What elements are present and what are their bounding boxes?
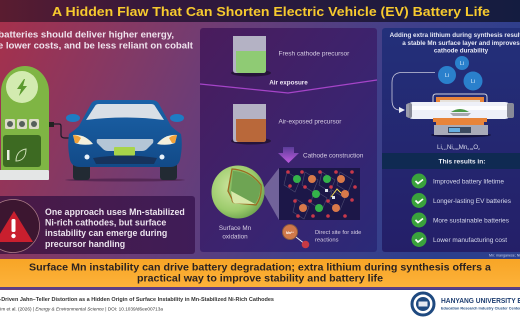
icon: cathode particle — [212, 166, 264, 218]
conclusion band — [0, 259, 520, 290]
arrow: cathode construction — [278, 147, 299, 163]
label: direct site: reactions — [315, 238, 339, 244]
chemical formula: 1+x — [442, 147, 447, 151]
chemical formula: O — [473, 144, 478, 151]
icon: Mn and oxygen site: Mn³⁺ — [286, 231, 294, 235]
label: surface Mn oxidation — [219, 225, 252, 240]
chemical formula: 0.04 — [467, 147, 474, 151]
icon: lithium ions: Li — [471, 79, 475, 85]
citation — [0, 297, 274, 312]
divider: air exposure — [200, 80, 377, 93]
warning text — [45, 207, 185, 249]
result: improved battery lifetime: Improved battery lifetime — [433, 178, 505, 186]
chemical formula: 2 — [478, 147, 480, 151]
solution text: a stable Mn surface layer and improves — [402, 40, 520, 47]
chemical formula: Mn — [459, 144, 468, 151]
conclusion text — [29, 262, 491, 284]
icon: warning — [0, 200, 40, 252]
icon: tube furnace — [406, 94, 514, 138]
results heading — [382, 153, 520, 169]
crystal structure — [279, 168, 360, 220]
icon: lithium ions: Li — [460, 61, 464, 67]
intro text — [0, 30, 194, 52]
logo: Hanyang University: Education Research Industry Cluster Center — [441, 306, 520, 310]
label: air-exposed precursor: Air-exposed precursor — [278, 118, 342, 126]
icon: lithium ions: Li — [445, 73, 449, 79]
icon: EV charger — [0, 66, 69, 180]
label: air exposure: Air exposure — [269, 80, 308, 86]
result: more sustainable batteries: More sustainable batteries — [433, 218, 509, 224]
label: direct site: Direct site for side — [315, 230, 361, 236]
icon: electric car — [65, 100, 185, 182]
chemical formula: Ni — [447, 144, 453, 151]
panel: precursor process — [200, 28, 377, 252]
label: surface Mn oxidation: oxidation — [222, 234, 248, 240]
result: longer-lasting batteries: Longer-lasting EV batteries — [433, 198, 511, 205]
label: surface Mn oxidation: Surface Mn — [219, 225, 252, 232]
result: lower manufacturing cost — [412, 232, 507, 247]
result: more sustainable batteries — [412, 212, 509, 228]
result: longer-lasting batteries — [412, 193, 511, 208]
solution text — [390, 32, 520, 54]
zoom wedge — [262, 168, 279, 220]
beaker: fresh precursor — [231, 36, 271, 76]
title: A Hidden Flaw That Can Shorten Electric Vehicle (EV) Battery Life — [52, 4, 490, 19]
results heading: This results in: — [439, 158, 485, 166]
conclusion text: practical way to improve stability and battery life — [137, 274, 383, 284]
panel: warning callout — [0, 196, 195, 254]
label: direct site — [315, 230, 361, 244]
warning text: One approach uses Mn-stabilized — [45, 207, 185, 217]
citation: Kim et al. (2026) | Energy & Environmental Science | DOI: 10.1039/d6ee00713a — [0, 306, 163, 312]
warning text: instability can emerge during — [45, 228, 167, 238]
chemical formula: Li — [437, 144, 442, 151]
title bar — [0, 0, 520, 22]
result: improved battery lifetime — [412, 174, 505, 188]
warning text: precursor handling — [45, 239, 125, 249]
warning text: Ni-rich cathodes, but surface — [45, 218, 166, 228]
beaker: air-exposed precursor — [231, 104, 271, 144]
result: lower manufacturing cost: Lower manufacturing cost — [433, 237, 507, 244]
conclusion text: Surface Mn instability can drive battery degradation; extra lithium during synthesis offers a — [29, 262, 491, 274]
logo: Hanyang University — [412, 293, 520, 315]
solution text: cathode durability — [434, 48, 489, 54]
icon: Mn and oxygen site — [282, 224, 309, 248]
label: cathode construction: Cathode construction — [303, 152, 364, 160]
panel: solution — [382, 28, 520, 252]
arrow: lithium into furnace — [392, 72, 435, 113]
chemical formula: 0.90 — [453, 147, 459, 151]
label: fresh precursor: Fresh cathode precursor — [278, 50, 350, 58]
icon: lithium ions — [438, 56, 482, 90]
